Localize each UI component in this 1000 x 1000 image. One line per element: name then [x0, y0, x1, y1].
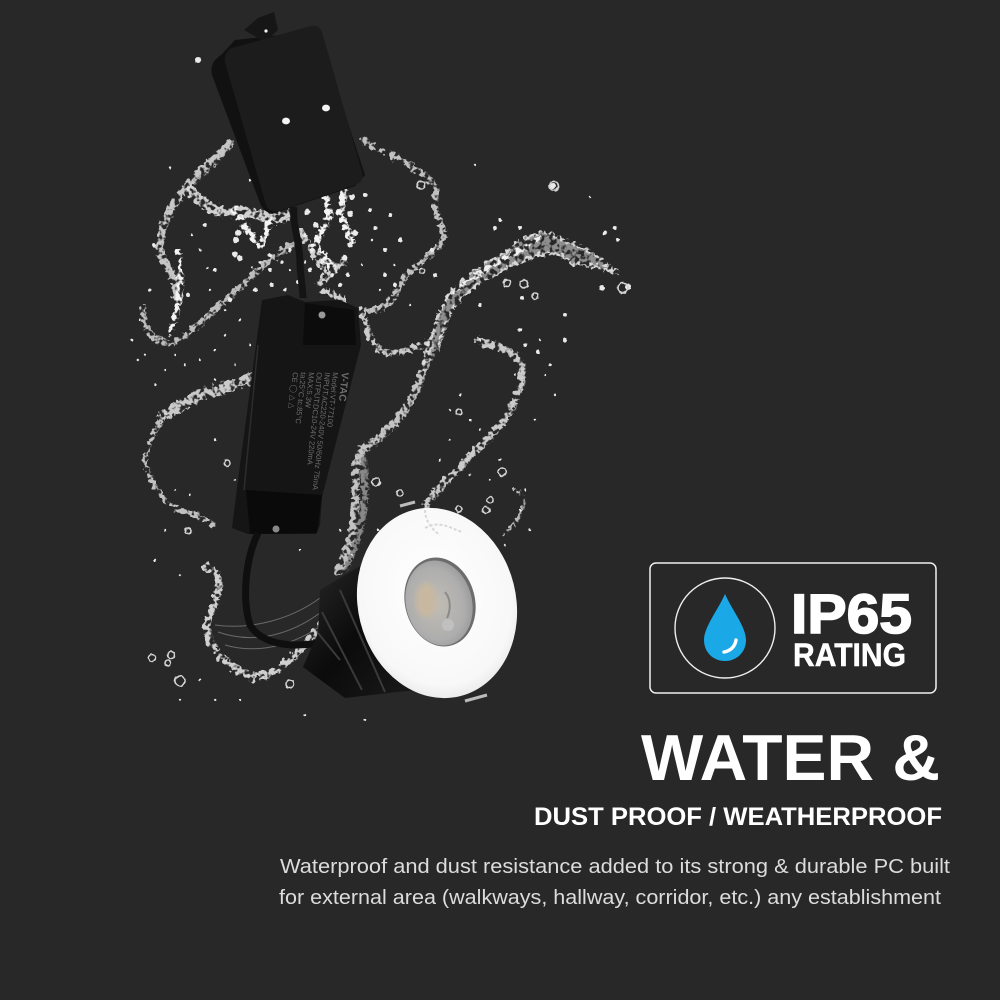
middle left water loop — [146, 378, 250, 525]
driver printed label: V-TAC — [336, 372, 350, 402]
badge frame — [650, 563, 936, 693]
heading: WATER & — [641, 721, 940, 794]
cable from driver to lamp — [246, 533, 330, 645]
downlight lamp — [303, 491, 537, 715]
badge label RATING: RATING — [793, 637, 906, 673]
LED driver — [232, 295, 361, 534]
junction box — [211, 12, 365, 214]
box shadow side — [211, 31, 365, 214]
lamp lens — [395, 550, 485, 654]
lamp white bezel — [337, 491, 537, 715]
driver printed label: MAX:5.3W — [303, 372, 316, 409]
lamp spring clips — [400, 502, 487, 701]
main water stream — [338, 232, 618, 572]
water on bezel — [425, 510, 462, 535]
right water branch — [425, 340, 524, 535]
subheading: DUST PROOF / WEATHERPROOF — [534, 803, 942, 831]
driver printed label — [287, 372, 350, 490]
driver body — [232, 295, 361, 534]
lamp black housing — [303, 560, 420, 698]
water splash behind products — [143, 140, 618, 678]
icon: water drop — [675, 578, 775, 678]
lamp LED chip — [416, 583, 436, 617]
badge label IP65: IP65 — [791, 582, 912, 645]
upper left water loop — [143, 143, 352, 344]
box screw holes — [264, 29, 330, 124]
driver printed label: INPUT:AC220-240V 50/60Hz 75mA — [311, 372, 332, 490]
description text — [279, 856, 950, 909]
water sheet wisps — [215, 598, 335, 649]
ring droplets — [417, 181, 425, 189]
driver printed label: CE ◯ △ △ — [287, 372, 300, 410]
description text: for external area (walkways, hallway, corridor, etc.) any establishment — [279, 887, 941, 909]
driver printed label: ta:25°C tc:85°C — [294, 372, 308, 425]
water droplets — [132, 60, 628, 720]
description text: Waterproof and dust resistance added to its strong & durable PC built — [280, 856, 950, 878]
upper right water loop — [362, 140, 445, 353]
driver printed label: OUTPUT:DC10-24V 220mA — [305, 372, 324, 465]
driver printed label: Model:VT-77100 — [325, 372, 340, 427]
cable from box to driver — [294, 207, 303, 298]
box mounting tab — [244, 12, 278, 42]
box front face — [225, 26, 363, 212]
lower left water loop — [205, 568, 335, 678]
IP65 rating badge — [650, 563, 936, 693]
